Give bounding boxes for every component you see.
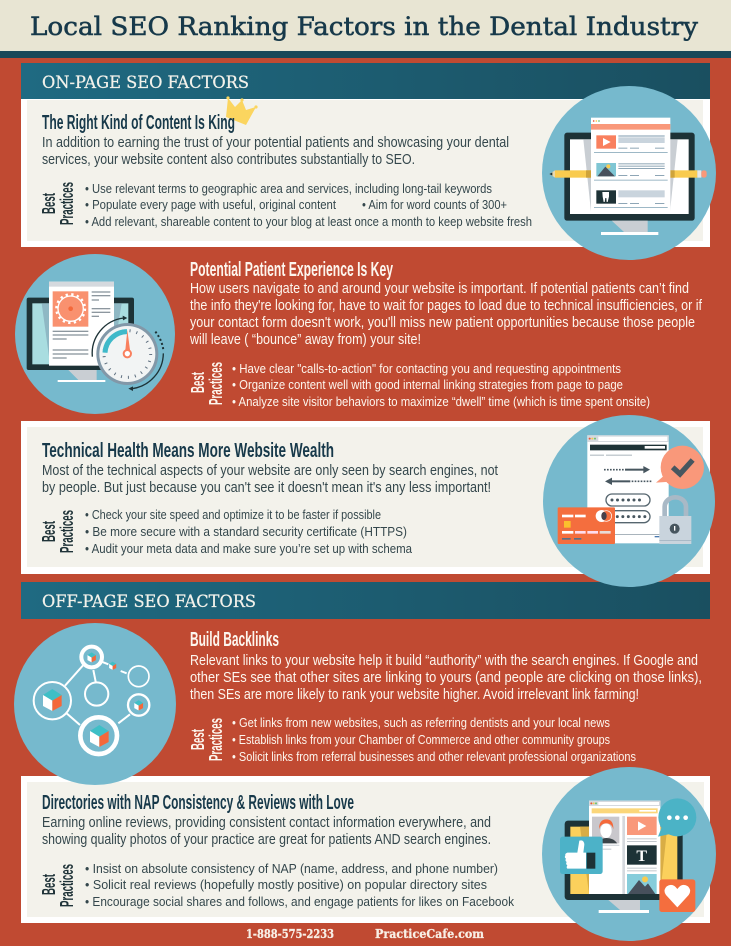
best practices label: Best	[39, 521, 59, 542]
best practices list: • Insist on absolute consistency of NAP (name, address, and phone number)	[85, 861, 498, 876]
body text	[190, 653, 702, 703]
best practices list: • Populate every page with useful, original content	[85, 197, 336, 212]
section header: off-page	[21, 582, 710, 619]
best practices label	[39, 864, 77, 907]
panel: content is king	[21, 96, 710, 247]
best practices label	[39, 182, 77, 225]
icon: security page, card and lock	[543, 415, 715, 587]
icon: website monitor with pencil	[542, 86, 716, 260]
best practices label: Best	[188, 372, 208, 393]
body text: showing quality photos of your practice are great for patients AND search engines.	[42, 832, 491, 848]
icon: social reviews monitor: T	[636, 848, 647, 865]
body text: Earning online reviews, providing consistent contact information everywhere, and	[42, 815, 491, 831]
footer contact	[246, 927, 484, 941]
icon: link network	[14, 623, 176, 785]
title: Local SEO Ranking Factors in the Dental Industry	[30, 12, 699, 41]
panel: potential patient experience	[188, 259, 703, 409]
heading: Build Backlinks	[190, 629, 279, 651]
best practices list: • Have clear "calls-to-action" for contacting you and requesting appointments	[232, 361, 621, 376]
best practices list: • Check your site speed and optimize it to be faster if possible	[85, 507, 381, 522]
panel: directories and reviews	[21, 776, 710, 923]
best practices list: • Encourage social shares and follows, and engage patients for likes on Facebook	[85, 894, 514, 909]
best practices list: • Use relevant terms to geographic area and services, including long-tail keywords	[85, 181, 492, 196]
best practices list	[232, 361, 650, 409]
best practices label: Best	[39, 193, 59, 214]
best practices list	[232, 715, 636, 764]
best practices label	[188, 718, 226, 761]
best practices label: Practices	[206, 362, 226, 405]
best practices label: Practices	[57, 864, 77, 907]
icon: crown	[226, 96, 258, 125]
heading: Technical Health Means More Website Wealth	[42, 440, 334, 462]
panel: build backlinks	[188, 629, 702, 764]
best practices list: • Be more secure with a standard security certificate (HTTPS)	[85, 524, 407, 539]
best practices list: • Establish links from your Chamber of Commerce and other community groups	[232, 732, 610, 747]
best practices list: • Solicit real reviews (hopefully mostly positive) on popular directory sites	[85, 877, 487, 892]
body text	[189, 281, 703, 348]
body text: services, your website content also contributes substantially to SEO.	[42, 152, 415, 168]
best practices list: • Analyze site visitor behaviors to maximize “dwell” time (which is time spent onsite)	[232, 394, 650, 409]
best practices label	[188, 362, 226, 405]
best practices label: Practices	[206, 718, 226, 761]
section header: off-page: OFF-PAGE SEO FACTORS	[42, 592, 256, 612]
best practices list: • Solicit links from referral businesses and other relevant professional organizations	[232, 749, 636, 764]
best practices list: • Get links from new websites, such as referring dentists and your local news	[232, 715, 610, 730]
body text	[42, 815, 491, 848]
panel: technical health	[21, 421, 710, 574]
body text	[42, 135, 509, 168]
icon: social reviews monitor	[542, 767, 716, 941]
heading: Directories with NAP Consistency & Reviews with Love	[42, 792, 354, 814]
heading: The Right Kind of Content Is King	[42, 112, 235, 134]
body text: Most of the technical aspects of your website are only seen by search engines, not	[42, 463, 498, 479]
best practices list	[85, 507, 413, 556]
best practices list: • Organize content well with good internal linking strategies from page to page	[232, 377, 623, 392]
best practices list	[85, 181, 532, 229]
title banner	[0, 0, 731, 58]
best practices label: Best	[188, 729, 208, 750]
section header: on-page: ON-PAGE SEO FACTORS	[42, 73, 249, 93]
best practices label: Best	[39, 874, 59, 895]
best practices list: • Audit your meta data and make sure you’re set up with schema	[85, 541, 413, 556]
body text: will leave ( “bounce” away from) your site!	[189, 332, 421, 348]
heading: Potential Patient Experience Is Key	[190, 259, 394, 281]
body text: then SEs are more likely to rank your website higher. Avoid irrelevant link farming!	[190, 687, 639, 703]
best practices label: Practices	[57, 182, 77, 225]
footer contact: 1-888-575-2233	[246, 927, 334, 941]
body text	[42, 463, 498, 496]
best practices list: • Add relevant, shareable content to your blog at least once a month to keep website fresh	[85, 214, 532, 229]
section header: on-page	[21, 63, 710, 99]
icon: speed gauge and monitor	[15, 254, 175, 414]
footer contact: PracticeCafe.com	[375, 927, 484, 941]
best practices label: Practices	[57, 510, 77, 553]
best practices list: • Aim for word counts of 300+	[362, 197, 507, 212]
body text: by people. But just because you can't see it doesn't mean it's any less important!	[42, 480, 491, 496]
body text: In addition to earning the trust of your potential patients and showcasing your dental	[42, 135, 509, 151]
best practices label	[39, 510, 77, 553]
best practices list	[85, 861, 514, 909]
